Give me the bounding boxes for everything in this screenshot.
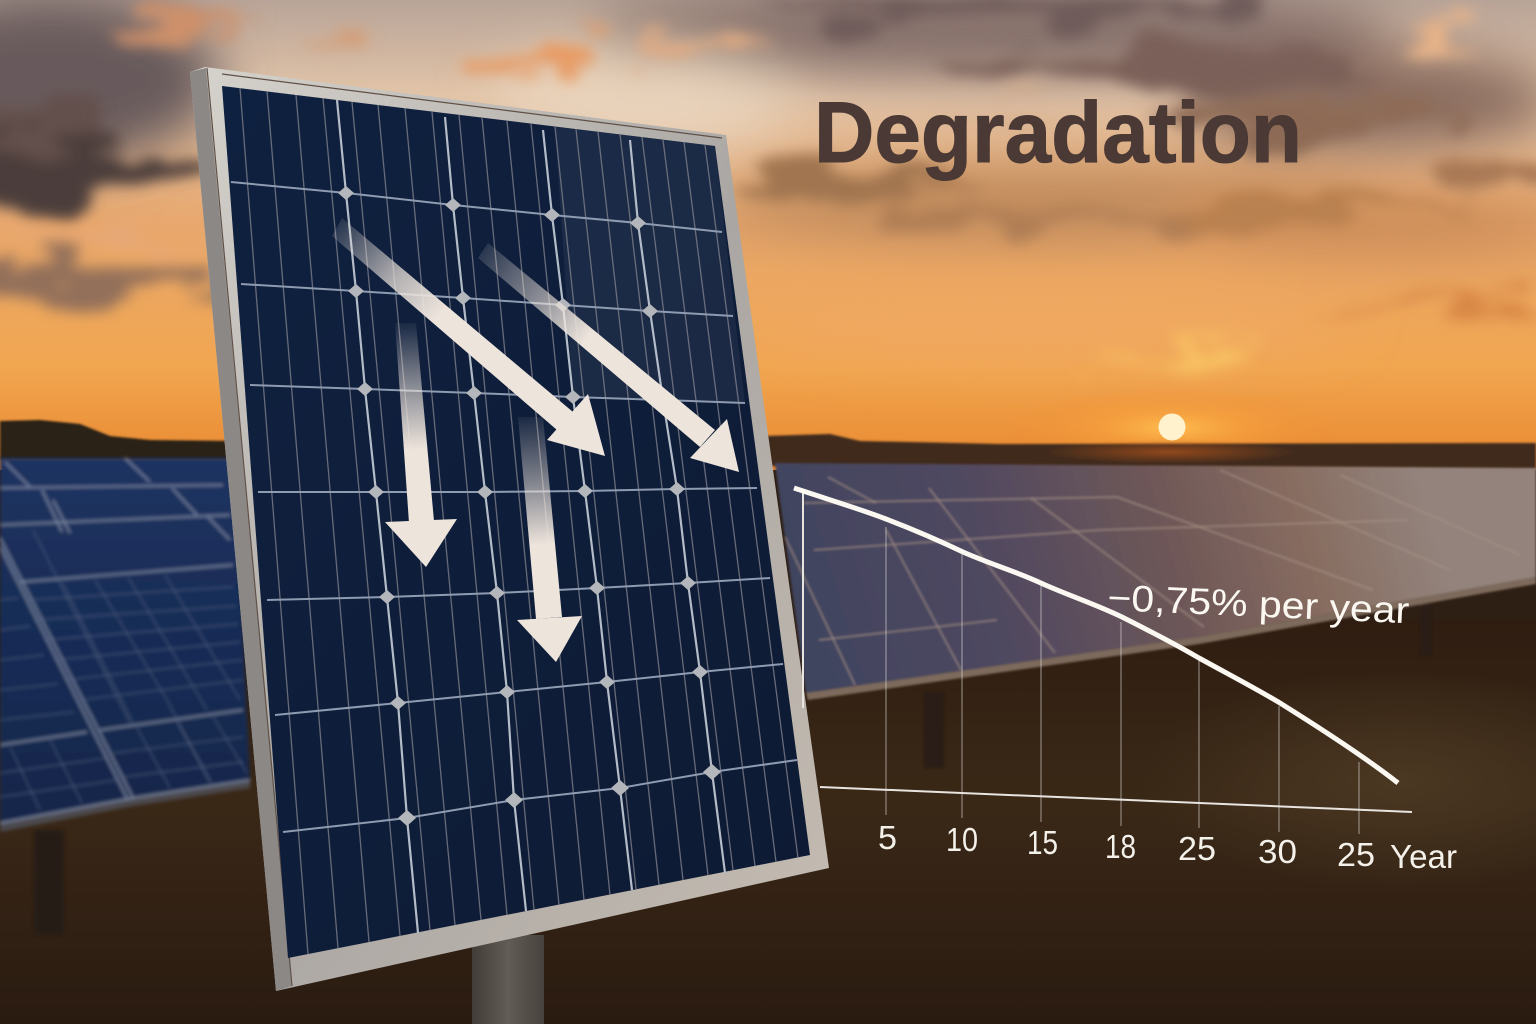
sunset sky background: [0, 0, 1536, 470]
solar field: left background: [0, 458, 250, 935]
frame top shadow line: [207, 68, 722, 986]
main solar panel: [190, 67, 829, 991]
mounting post: [472, 935, 544, 1024]
degradation curve: [794, 488, 1398, 783]
distant tree line: [0, 420, 1536, 470]
panel cell surface: [222, 86, 810, 958]
ground: [0, 620, 1536, 1024]
year tick lines: [886, 527, 1359, 834]
thin cell finger lines: [240, 88, 798, 954]
cell row gaps: [231, 182, 797, 832]
x-axis labels: 5: [878, 819, 897, 856]
chart axes: [803, 490, 1412, 812]
title: Degradation: [814, 85, 1302, 181]
x-axis labels: 10: [946, 821, 978, 858]
x-axis labels: 15: [1027, 824, 1058, 861]
x-axis labels: 25: [1337, 836, 1375, 873]
x-axis labels: 18: [1105, 828, 1136, 865]
arrow: vertical left: [385, 323, 457, 567]
panel aluminium frame: [190, 67, 829, 991]
arrow: diagonal right: [478, 243, 739, 472]
rate label: −0,75% per year: [1107, 577, 1410, 631]
x-axis labels: Year: [1390, 838, 1457, 875]
degradation line chart: [794, 488, 1457, 875]
x-axis labels: 30: [1258, 833, 1297, 870]
setting sun: [1002, 386, 1342, 470]
cell column gaps: [337, 100, 725, 933]
upper right sheen: [555, 127, 745, 403]
junction diamonds: [338, 186, 721, 826]
x-axis labels: [878, 819, 1457, 875]
x-axis labels: 25: [1178, 830, 1216, 867]
frame left side face: [190, 68, 292, 991]
arrow: vertical centre: [517, 417, 582, 662]
solar field: right background: [775, 463, 1536, 768]
arrow: diagonal left: [332, 218, 605, 456]
